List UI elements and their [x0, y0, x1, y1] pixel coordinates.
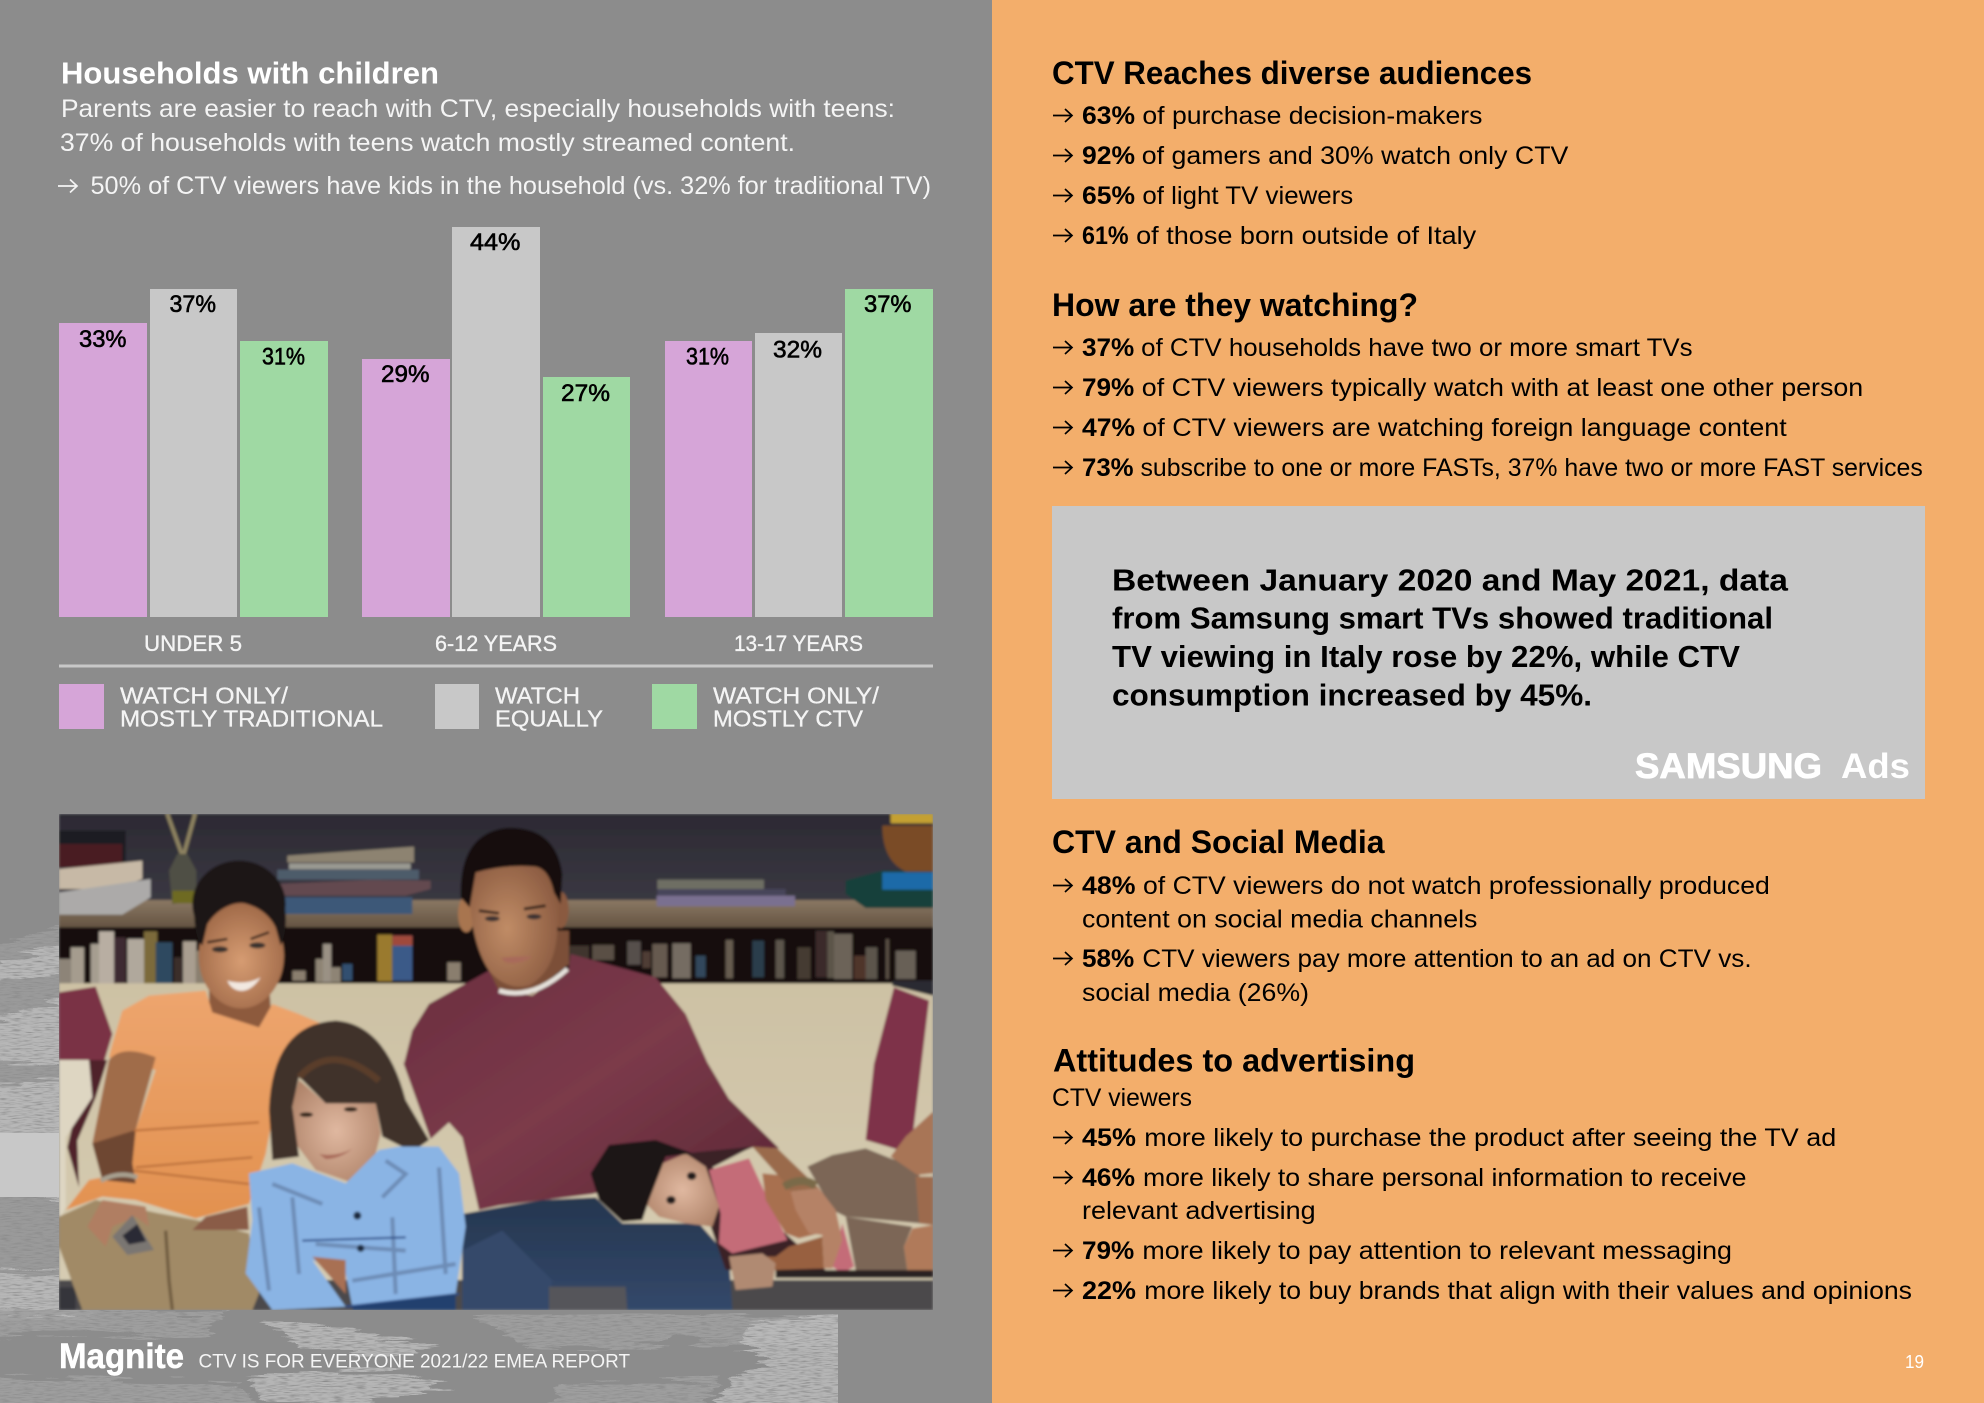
- callout text: [1112, 562, 1789, 712]
- legend item: watch only / mostly CTV: WATCH ONLY/: [713, 682, 880, 708]
- legend item: watch only / mostly traditional: MOSTLY TRADITIONAL: [120, 706, 383, 732]
- bars: 6-12 years: 44%: [470, 229, 520, 256]
- man's forearm and hand: [752, 1147, 842, 1268]
- bars: 6-12 years: 27%: [561, 380, 610, 407]
- bullet: 50% of CTV viewers: 50% of CTV viewers have kids in the household (vs. 32% for traditional TV): [90, 172, 931, 200]
- bullet: 65%: 65%: [1082, 182, 1135, 210]
- bullet: 22%: 22%: [1082, 1277, 1136, 1305]
- bullet: 65%: of light TV viewers: [1142, 182, 1353, 210]
- axis category labels: 13-17 YEARS: [734, 631, 863, 656]
- bars: 13-17 years: 37%: [864, 291, 912, 318]
- decorative brush strokes: [0, 915, 860, 1403]
- intro paragraph line 2: 37% of households with teens watch mostly streamed content.: [60, 129, 795, 157]
- legend item: watch only / mostly traditional: WATCH ONLY/: [120, 682, 289, 708]
- bullet: 48%: content on social media channels: [1082, 905, 1477, 933]
- bullet: 63%: of purchase decision-makers: [1142, 102, 1482, 130]
- bowl and vase: [167, 814, 933, 904]
- axis category labels: 6-12 YEARS: [435, 631, 557, 656]
- man's sweater: [402, 954, 779, 1210]
- bullet: 61%: of those born outside of Italy: [1136, 222, 1477, 250]
- bar chart: viewing by age of children: [59, 227, 933, 732]
- legend item: watch only / mostly traditional: [59, 682, 383, 732]
- bullet: 46%: more likely to share personal information to receive: [1143, 1164, 1746, 1192]
- bullet: 37%: of CTV households have two or more smart TVs: [1141, 334, 1693, 362]
- heading: How are they watching?: [1052, 287, 1418, 323]
- sofa: [59, 981, 933, 1310]
- bars: 6-12 years: 29%: [381, 361, 430, 388]
- girl lying on the man's lap: [591, 1112, 933, 1290]
- bars: 6-12 years: [362, 227, 630, 617]
- bullet: 79%: of CTV viewers typically watch with at least one other person: [1142, 374, 1863, 402]
- man's jeans: [462, 1197, 732, 1310]
- bullet: 58%: social media (26%): [1082, 979, 1309, 1007]
- heading: Attitudes to advertising: [1053, 1042, 1415, 1078]
- bullet: 37%: 37%: [1082, 334, 1134, 362]
- bullet: 45%: 45%: [1082, 1124, 1136, 1152]
- bars: 13-17 years: [665, 289, 933, 617]
- bullet: 92%: 92%: [1082, 142, 1135, 170]
- bars: 13-17 years: 31%: [686, 344, 729, 371]
- bullet: 46%: 46%: [1082, 1164, 1135, 1192]
- bullet: 63%: 63%: [1082, 102, 1135, 130]
- legend item: watch only / mostly CTV: [652, 682, 880, 732]
- bullet: 48%: [1053, 872, 1770, 933]
- panel: orange right page: [992, 0, 1984, 1403]
- boy: [246, 1021, 466, 1310]
- bullet: 79%: more likely to pay attention to relevant messaging: [1142, 1237, 1732, 1265]
- bullet: 48%: 48%: [1082, 872, 1136, 900]
- bars: under 5: 37%: [170, 291, 216, 318]
- bullet: 61%: 61%: [1082, 222, 1129, 250]
- heading: CTV and Social Media: [1052, 824, 1385, 860]
- woman: [66, 861, 322, 1218]
- photo: family watching TV on a sofa: [59, 814, 933, 1310]
- bars: under 5: [59, 289, 328, 617]
- logo: Magnite: Magnite: [59, 1337, 184, 1376]
- subheading: CTV viewers: CTV viewers: [1052, 1084, 1192, 1112]
- axis category labels: UNDER 5: [144, 631, 242, 656]
- callout: Samsung data: [1052, 506, 1925, 799]
- bullet: 46%: [1053, 1164, 1746, 1225]
- section: How are they watching: [1052, 287, 1923, 482]
- bars: under 5: 33%: [79, 326, 126, 353]
- bullet: 58%: CTV viewers pay more attention to an ad on CTV vs.: [1142, 945, 1752, 973]
- bullet: 79%: 79%: [1082, 1237, 1134, 1265]
- page number: 19: [1905, 1352, 1924, 1372]
- bullet: 22%: more likely to buy brands that align with their values and opinions: [1144, 1277, 1912, 1305]
- bullet: 58%: 58%: [1082, 945, 1134, 973]
- logo: Samsung Ads: [1635, 747, 1910, 786]
- heading: Households with children: Households with children: [61, 56, 439, 90]
- intro paragraph line 1: Parents are easier to reach with CTV, especially households with teens:: [61, 95, 895, 123]
- callout text: TV viewing in Italy rose by 22%, while CTV: [1112, 639, 1740, 674]
- axis category labels: [144, 631, 863, 656]
- bullet: 47%: of CTV viewers are watching foreign language content: [1142, 414, 1787, 442]
- legend item: watch equally: WATCH: [495, 682, 580, 708]
- bullet: 92%: of gamers and 30% watch only CTV: [1142, 142, 1569, 170]
- section: Attitudes to advertising: [1052, 1042, 1912, 1305]
- bookshelf: [59, 900, 933, 989]
- bullet: 48%: of CTV viewers do not watch professionally produced: [1143, 872, 1770, 900]
- logo: Samsung Ads: Ads: [1841, 747, 1910, 786]
- logo: Samsung Ads: SAMSUNG: [1635, 747, 1822, 786]
- bullet: 65%: [1053, 182, 1353, 210]
- legend item: watch equally: [435, 682, 603, 732]
- heading: CTV Reaches diverse audiences: [1052, 55, 1532, 91]
- report title: CTV IS FOR EVERYONE 2021/22 EMEA REPORT: [198, 1352, 630, 1372]
- bars: under 5: 31%: [262, 344, 305, 371]
- woman's trousers and hands: [59, 1200, 259, 1310]
- callout text: consumption increased by 45%.: [1112, 678, 1592, 712]
- bullet: 45%: more likely to purchase the product after seeing the TV ad: [1144, 1124, 1836, 1152]
- section: CTV and social media: [1052, 824, 1770, 1007]
- bullet: 47%: 47%: [1082, 414, 1135, 442]
- footer: Magnite logo and report title: [59, 1337, 630, 1376]
- left text block: [58, 56, 931, 200]
- panel: grey left page: [0, 0, 992, 1403]
- legend item: watch only / mostly CTV: MOSTLY CTV: [713, 706, 864, 732]
- legend: [59, 682, 880, 732]
- legend item: watch equally: EQUALLY: [495, 706, 603, 732]
- bullet: 73%: subscribe to one or more FASTs, 37% have two or more FAST services: [1140, 454, 1923, 482]
- bullet: 73%: 73%: [1082, 454, 1134, 482]
- callout text: Between January 2020 and May 2021, data: [1112, 562, 1789, 598]
- books on shelf: [59, 844, 933, 915]
- bullet: 58%: [1053, 945, 1752, 1007]
- bullet: 46%: relevant advertising: [1082, 1197, 1316, 1225]
- bullet: 79%: 79%: [1082, 374, 1134, 402]
- callout text: from Samsung smart TVs showed traditional: [1112, 600, 1773, 636]
- man's head: [458, 828, 569, 994]
- section: CTV reaches diverse audiences: [1052, 55, 1569, 250]
- bars: 13-17 years: 32%: [773, 336, 822, 364]
